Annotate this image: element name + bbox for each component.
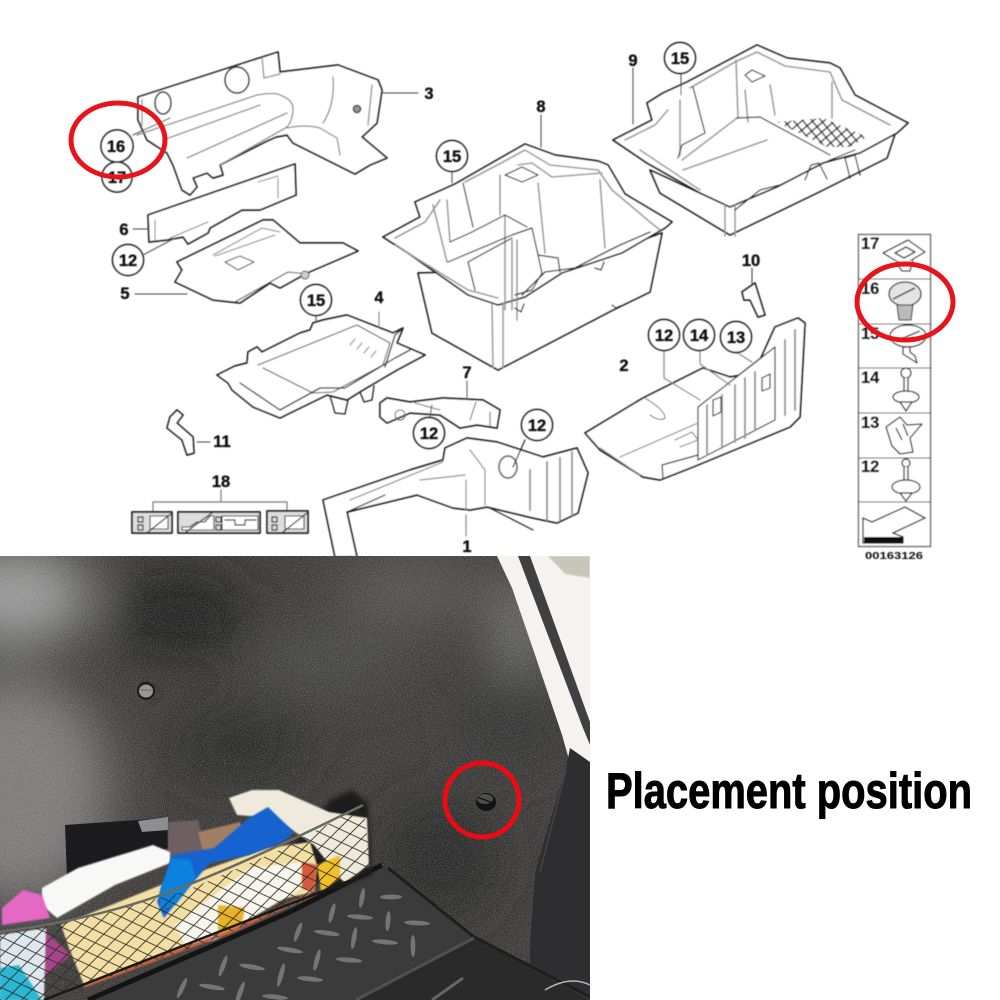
trim and white exterior, top right bbox=[497, 556, 590, 762]
stud fastener on carpet bbox=[137, 682, 155, 700]
part number labels: 9 bbox=[628, 52, 638, 70]
side interior panel bbox=[530, 748, 590, 1000]
white bottle bbox=[0, 928, 46, 1000]
tray edge bbox=[356, 938, 590, 1000]
part number labels: 15 bbox=[307, 292, 325, 310]
legend numbers: 12 bbox=[861, 458, 879, 476]
fastener legend strip bbox=[858, 234, 931, 562]
legend numbers: 13 bbox=[861, 414, 879, 432]
part 11: clip bbox=[167, 410, 210, 455]
carpet wall bbox=[0, 545, 590, 1000]
part number labels: 6 bbox=[119, 221, 129, 239]
part number labels: 10 bbox=[742, 252, 760, 270]
part 1: lower side panel bbox=[323, 438, 588, 557]
part number labels: 12 bbox=[420, 425, 438, 443]
part number labels: 2 bbox=[619, 357, 629, 375]
part number labels: 13 bbox=[727, 329, 745, 347]
part number labels: 12 bbox=[528, 417, 546, 435]
part 7: bracket bbox=[380, 381, 500, 428]
carpet speckle bbox=[0, 556, 590, 1000]
mat tread pattern bbox=[175, 888, 430, 1000]
pink jar bbox=[2, 890, 50, 925]
part number labels bbox=[107, 50, 760, 556]
legend numbers: 16 bbox=[861, 280, 879, 298]
part number labels: 14 bbox=[690, 327, 709, 345]
part number labels: 4 bbox=[374, 289, 384, 307]
cream tissue bbox=[229, 790, 369, 883]
part number labels: 5 bbox=[120, 285, 130, 303]
diagram reference number: 00163126 bbox=[865, 551, 924, 562]
leader line to 3 bbox=[382, 92, 418, 94]
red circle: part 16 in legend bbox=[857, 264, 953, 340]
leader lines bbox=[133, 68, 681, 417]
part 10: clip bbox=[742, 268, 765, 317]
part 3: side trim panel bbox=[137, 52, 418, 195]
legend numbers bbox=[861, 235, 880, 476]
part number labels: 12 bbox=[655, 327, 673, 345]
legend fastener icons bbox=[883, 240, 926, 501]
blue cloth bbox=[157, 807, 294, 918]
photo: trunk interior bbox=[0, 545, 590, 1000]
yellow and orange packaging bbox=[61, 842, 317, 985]
part number labels: 16 bbox=[107, 138, 125, 156]
legend numbers: 14 bbox=[861, 369, 880, 387]
part 2: right lower panel bbox=[585, 318, 805, 480]
cargo net bbox=[0, 808, 372, 1000]
part number labels: 17 bbox=[108, 169, 126, 187]
direction arrow icon bbox=[863, 507, 925, 543]
part 9: upper storage tub bbox=[613, 45, 908, 236]
part 8: large storage tub bbox=[383, 144, 672, 370]
parts diagram bbox=[101, 42, 908, 557]
anti-slip mesh bbox=[777, 118, 867, 147]
cargo net contents bbox=[0, 790, 380, 1000]
black pouch bbox=[65, 817, 168, 878]
part number labels: 1 bbox=[462, 538, 472, 556]
placement fastener bbox=[476, 793, 496, 811]
rubber mat bbox=[88, 865, 590, 1000]
white towel bbox=[42, 845, 170, 918]
red circle: part 16 on panel bbox=[71, 103, 165, 177]
part number labels: 15 bbox=[671, 50, 689, 68]
part number labels: 8 bbox=[536, 98, 546, 116]
top-right door seal bbox=[518, 556, 590, 745]
part 18: switch set bbox=[132, 490, 308, 533]
part number labels: 7 bbox=[462, 364, 472, 382]
part number labels: 18 bbox=[212, 473, 230, 491]
part 5: floor panel bbox=[135, 220, 358, 303]
part number labels: 11 bbox=[213, 433, 231, 451]
callout circles for part numbers bbox=[101, 42, 752, 448]
part number labels: 3 bbox=[424, 85, 434, 103]
red circle: placement on photo bbox=[445, 763, 519, 837]
part number labels: 12 bbox=[119, 252, 137, 270]
legend numbers: 17 bbox=[861, 235, 879, 253]
part 6: strip panel bbox=[133, 164, 296, 244]
legend numbers: 15 bbox=[861, 325, 879, 343]
clear packet bbox=[167, 820, 203, 861]
part number labels: 15 bbox=[443, 148, 461, 166]
part 4: tray bbox=[217, 312, 425, 418]
